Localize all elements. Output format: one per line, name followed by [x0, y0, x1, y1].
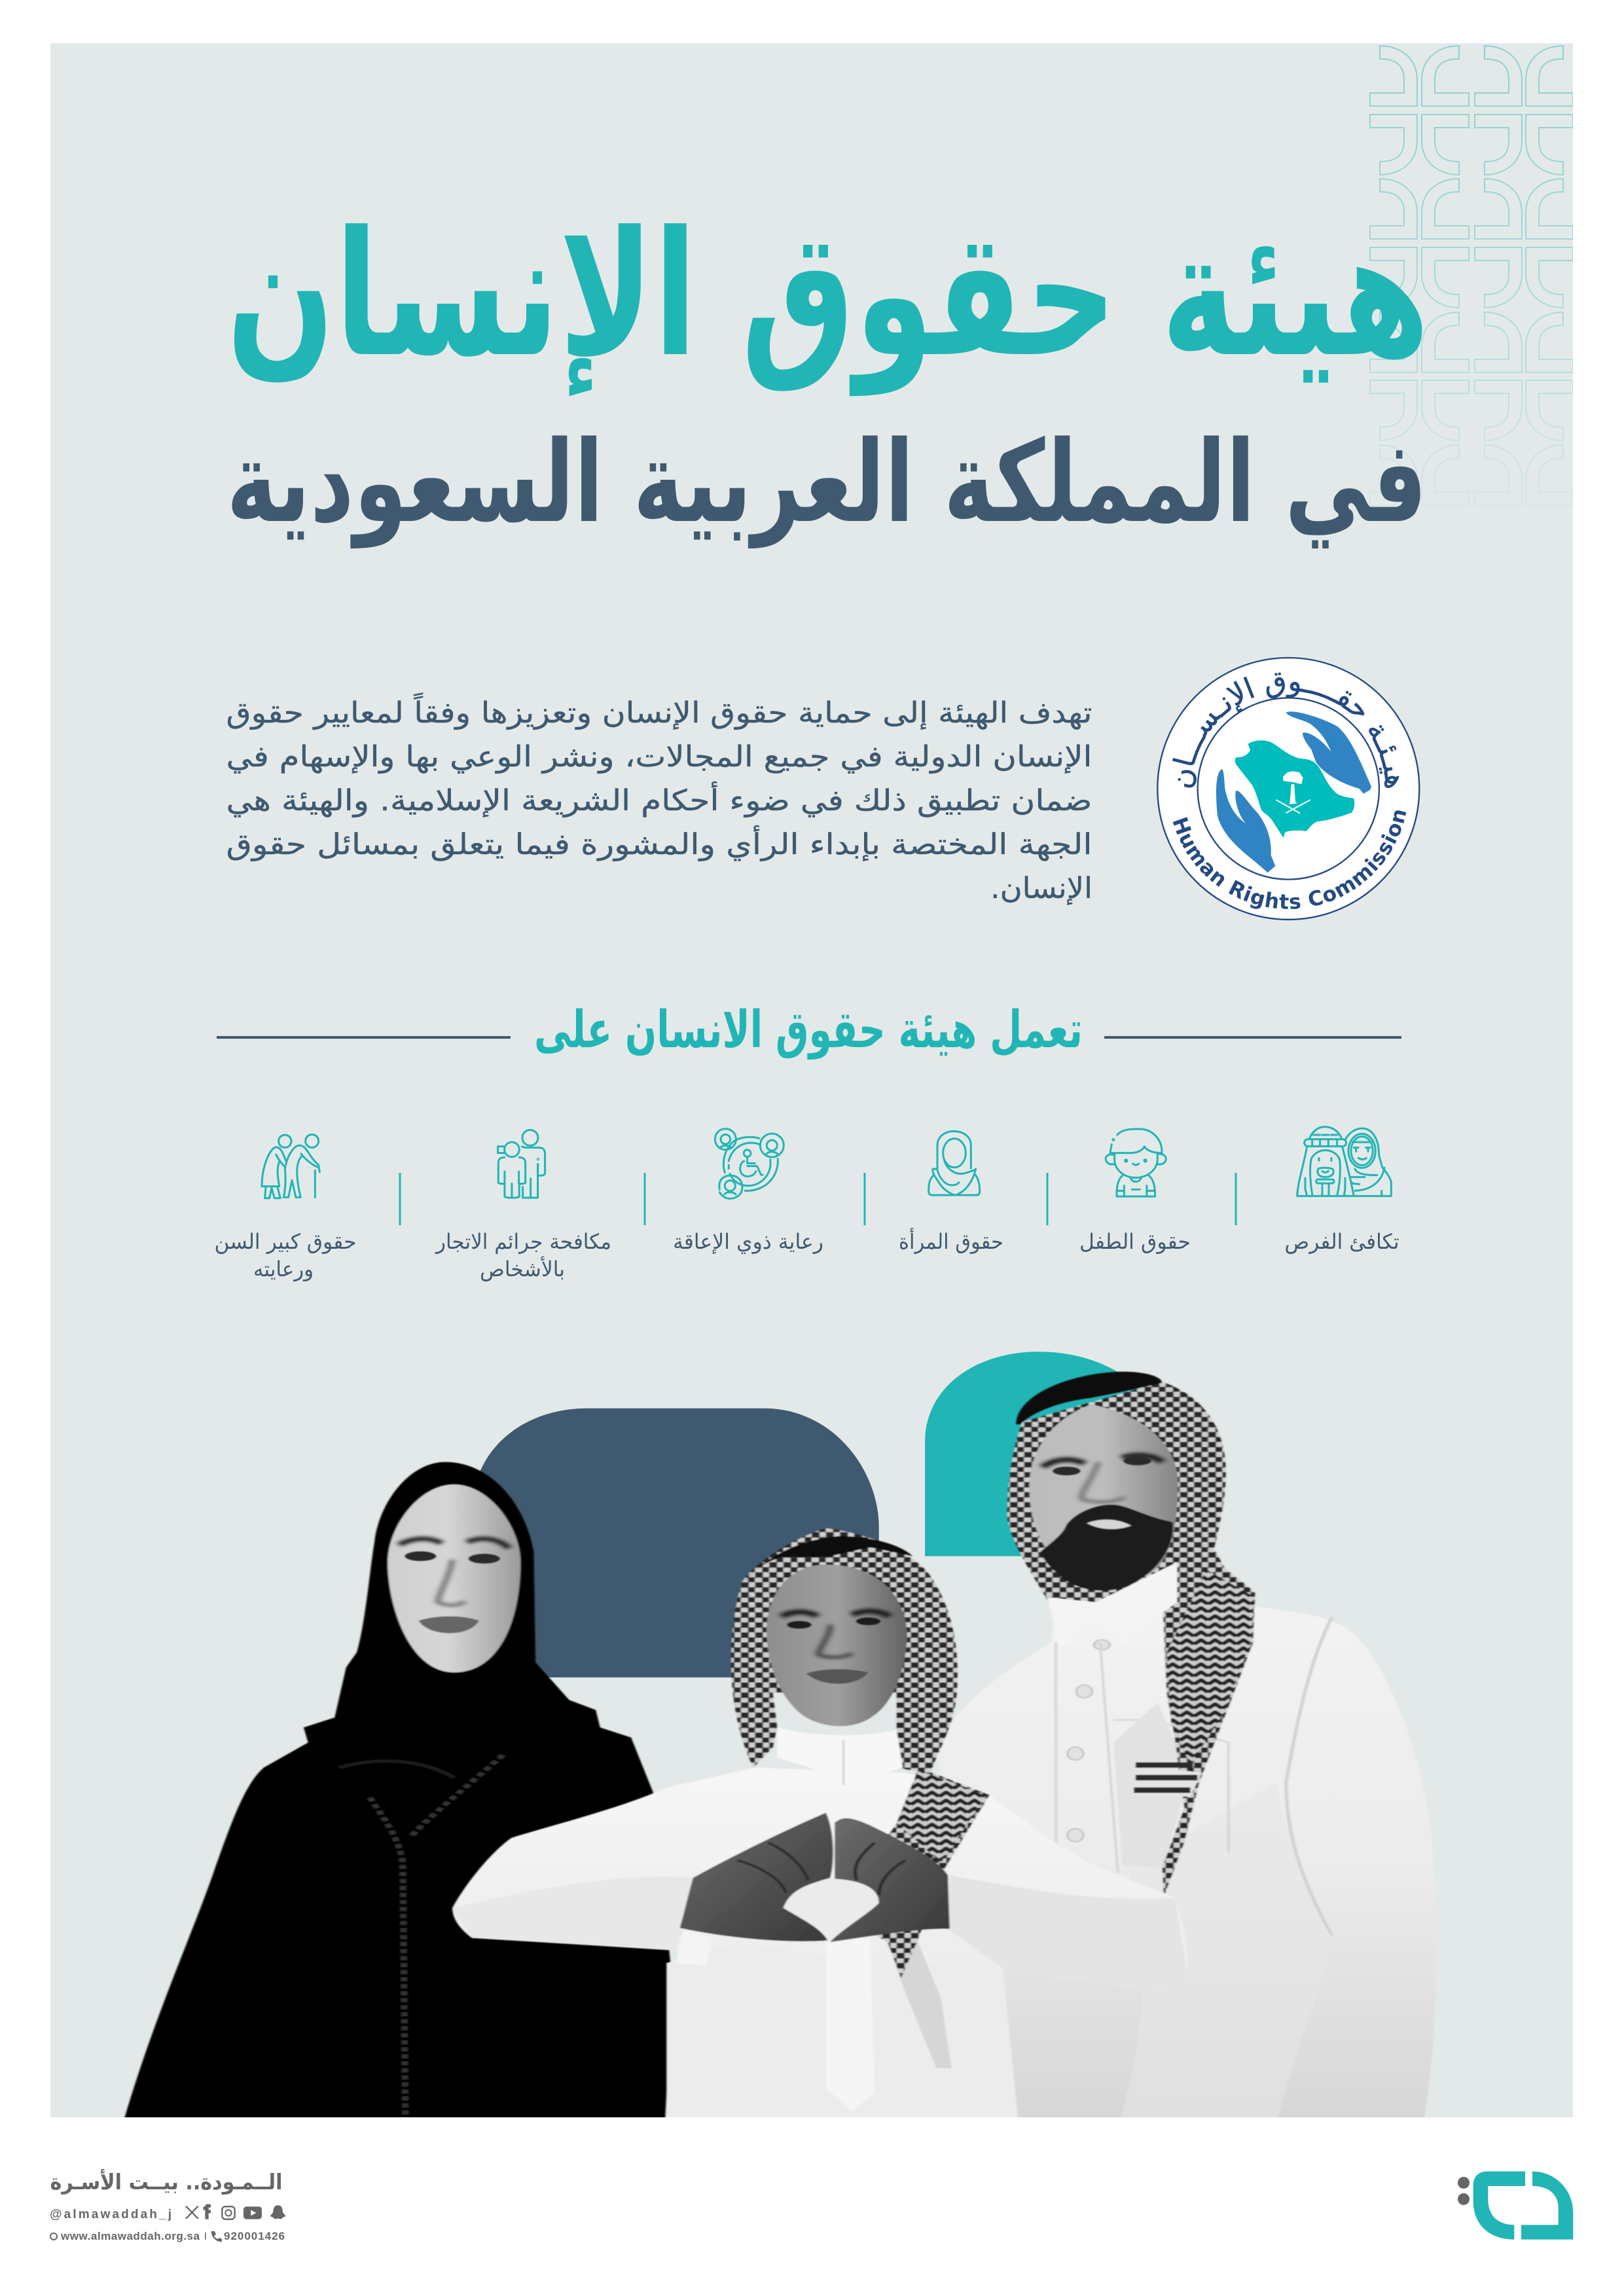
label: combating trafficking: بالأشخاص [480, 1256, 565, 1282]
label: women's rights: حقوق المرأة [899, 1228, 1003, 1254]
logo map of Saudi Arabia [1235, 740, 1354, 838]
section heading: تعمل هيئة حقوق الانسان على [534, 1001, 1083, 1060]
man beard [1040, 1505, 1173, 1590]
icon: wheelchair with people [715, 1129, 784, 1198]
boy headcloth [731, 1528, 958, 1774]
label: elderly rights: ورعايته [253, 1257, 314, 1282]
icon: elderly couple [262, 1134, 319, 1198]
boy igal [744, 1536, 912, 1582]
icon labels [215, 1228, 1399, 1282]
navy arch shape [477, 1408, 879, 1677]
logo palm and swords [1276, 771, 1310, 814]
heart hands [680, 1813, 950, 1942]
description paragraph: ضمان تطبيق ذلك في ضوء أحكام الشريعة الإسلامية. والهيئة هي [226, 781, 1092, 817]
teal arch shape [925, 1352, 1144, 1556]
footer website and phone: 920001426 [224, 2230, 285, 2242]
boy collar [777, 1727, 903, 1785]
icon: equal opportunity family [1297, 1127, 1391, 1196]
label: elderly rights: حقوق كبير السن [215, 1229, 356, 1254]
label: combating trafficking [435, 1229, 611, 1282]
boy face [767, 1565, 907, 1726]
label: people with disabilities: رعاية ذوي الإعاقة [673, 1229, 823, 1254]
description paragraph: الإنسان. [990, 872, 1092, 905]
logo arabic ring text: هيـئـة حقــــوق الإنـســـان [1172, 673, 1399, 788]
photo collage [122, 1352, 1437, 2126]
label: child rights: حقوق الطفل [1079, 1229, 1191, 1254]
boy shoulder scarf [888, 1933, 952, 2068]
man face [1030, 1405, 1178, 1587]
boy [452, 1528, 1188, 2126]
footer social icons [186, 2204, 286, 2219]
label: elderly rights [215, 1229, 356, 1282]
man headcloth [1007, 1382, 1226, 1607]
icon: child [1106, 1129, 1166, 1196]
separators [400, 1173, 1236, 1225]
man igal [1016, 1372, 1162, 1424]
logo upper hand [1286, 711, 1371, 794]
man collar [1046, 1562, 1179, 1619]
logo lower hand [1216, 769, 1275, 872]
woman face [388, 1484, 520, 1672]
man thobe [937, 1562, 1437, 2126]
label: combating trafficking: مكافحة جرائم الاتجار [435, 1229, 611, 1254]
description paragraph: تهدف الهيئة إلى حماية حقوق الإنسان وتعزيزها وفقاً لمعايير حقوق [226, 692, 1092, 730]
label: equal opportunities: تكافئ الفرص [1284, 1229, 1399, 1254]
footer slogan: الــمـودة.. بيــت الأسـرة [50, 2168, 283, 2195]
footer website and phone [50, 2230, 285, 2242]
boy cuff [676, 1930, 713, 1965]
description paragraph: الإنسان الدولية في جميع المجالات، ونشر الوعي بها والإسهام في [226, 740, 1092, 774]
description paragraph: الجهة المختصة بإبداء الرأي والمشورة فيما يتعلق بمسائل حقوق [226, 825, 1092, 861]
description paragraph [226, 692, 1092, 905]
man shawl [1113, 1702, 1184, 1868]
icon: woman [929, 1131, 980, 1195]
decorative corner pattern [1370, 46, 1573, 505]
woman abaya [122, 1462, 679, 2126]
boy thobe and sleeves [452, 1768, 1188, 2126]
almawaddah logo [1458, 2172, 1573, 2240]
icon: family protection [498, 1130, 545, 1198]
footer website and phone: www.almawaddah.org.sa [60, 2230, 200, 2242]
woman [122, 1462, 679, 2126]
logo english ring text: Human Rights Commission [1173, 810, 1406, 909]
man [937, 1372, 1437, 2126]
footer handle: @almawaddah_j [50, 2208, 171, 2221]
footer brand block [50, 2168, 286, 2242]
logo: Human Rights Commission [1157, 657, 1420, 920]
